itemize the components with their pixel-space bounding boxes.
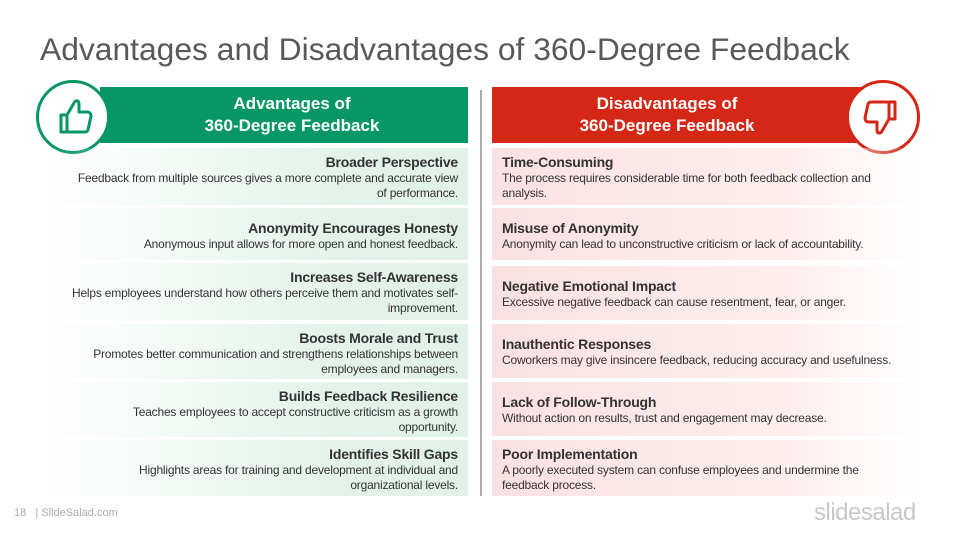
logo: slidesalad	[814, 499, 916, 526]
advantages list	[54, 148, 468, 496]
item: Boosts Morale and Trust: Promotes better communication and strengthens relationships between	[93, 347, 458, 361]
item: Anonymity Encourages Honesty	[40, 208, 468, 260]
item: Increases Self-Awareness: Helps employees understand how others perceive them and motivates self-	[72, 286, 458, 300]
item: Inauthentic Responses: Coworkers may give insincere feedback, reducing accuracy and usefulness.	[502, 353, 891, 367]
item: Builds Feedback Resilience: Teaches employees to accept constructive criticism as a growth	[133, 405, 458, 419]
item: Poor Implementation: A poorly executed system can confuse employees and undermine the	[502, 463, 859, 477]
icon: thumbs down	[846, 80, 920, 154]
item: Poor Implementation: Poor Implementation	[502, 446, 637, 462]
item: Time-Consuming: The process requires considerable time for both feedback collection and	[502, 171, 871, 185]
item: Increases Self-Awareness: Increases Self-Awareness	[290, 269, 458, 285]
item: Broader Perspective: Feedback from multiple sources gives a more complete and accurate view	[78, 171, 458, 185]
item: Lack of Follow-Through	[492, 382, 920, 436]
item: Builds Feedback Resilience	[40, 382, 468, 437]
item: Lack of Follow-Through: Without action on results, trust and engagement may decrease.	[502, 411, 827, 425]
panel: disadvantages header: 360-Degree Feedback	[580, 116, 754, 135]
icon: thumbs up	[36, 80, 110, 154]
item: Misuse of Anonymity: Misuse of Anonymity	[502, 220, 638, 236]
item: Anonymity Encourages Honesty: Anonymous input allows for more open and honest feedback.	[144, 237, 458, 251]
item: Time-Consuming: Time-Consuming	[502, 154, 613, 170]
item: Identifies Skill Gaps: Identifies Skill Gaps	[329, 446, 458, 462]
item: Identifies Skill Gaps: Highlights areas for training and development at individual and	[139, 463, 458, 477]
item: Identifies Skill Gaps: organizational levels.	[350, 478, 458, 492]
divider	[480, 90, 482, 496]
panel: disadvantages header	[492, 87, 872, 143]
title: Advantages and Disadvantages of 360-Degree Feedback	[40, 31, 850, 67]
item: Increases Self-Awareness	[40, 263, 468, 320]
panel: advantages header	[100, 87, 468, 143]
item: Misuse of Anonymity: Anonymity can lead to unconstructive criticism or lack of accountability.	[502, 237, 863, 251]
item: Builds Feedback Resilience: Builds Feedback Resilience	[279, 388, 458, 404]
item: Negative Emotional Impact: Negative Emotional Impact	[502, 278, 676, 294]
item: Inauthentic Responses: Inauthentic Responses	[502, 336, 651, 352]
item: Lack of Follow-Through: Lack of Follow-Through	[502, 394, 656, 410]
item: Negative Emotional Impact: Excessive negative feedback can cause resentment, fear, or anger.	[502, 295, 846, 309]
panel: advantages header: 360-Degree Feedback	[205, 116, 379, 135]
item: Time-Consuming: analysis.	[502, 186, 547, 200]
item: Boosts Morale and Trust	[40, 324, 468, 379]
item: Negative Emotional Impact	[492, 266, 920, 320]
panel: advantages header: Advantages of	[233, 94, 351, 113]
panel: disadvantages header: Disadvantages of	[597, 94, 737, 113]
item: Time-Consuming	[492, 148, 920, 205]
item: Broader Perspective	[40, 148, 468, 205]
item: Broader Perspective: of performance.	[377, 186, 458, 200]
item: Anonymity Encourages Honesty: Anonymity Encourages Honesty	[248, 220, 458, 236]
footer: 18 | SlideSalad.com	[14, 507, 118, 519]
item: Poor Implementation: feedback process.	[502, 478, 596, 492]
item: Builds Feedback Resilience: opportunity.	[399, 420, 458, 434]
item: Misuse of Anonymity	[492, 208, 920, 260]
disadvantages list	[492, 148, 903, 496]
item: Broader Perspective: Broader Perspective	[326, 154, 458, 170]
item: Increases Self-Awareness: improvement.	[388, 301, 458, 315]
item: Boosts Morale and Trust: employees and managers.	[321, 362, 458, 376]
item: Identifies Skill Gaps	[40, 440, 468, 496]
item: Poor Implementation	[492, 440, 920, 496]
item: Boosts Morale and Trust: Boosts Morale and Trust	[299, 330, 458, 346]
item: Inauthentic Responses	[492, 324, 920, 378]
